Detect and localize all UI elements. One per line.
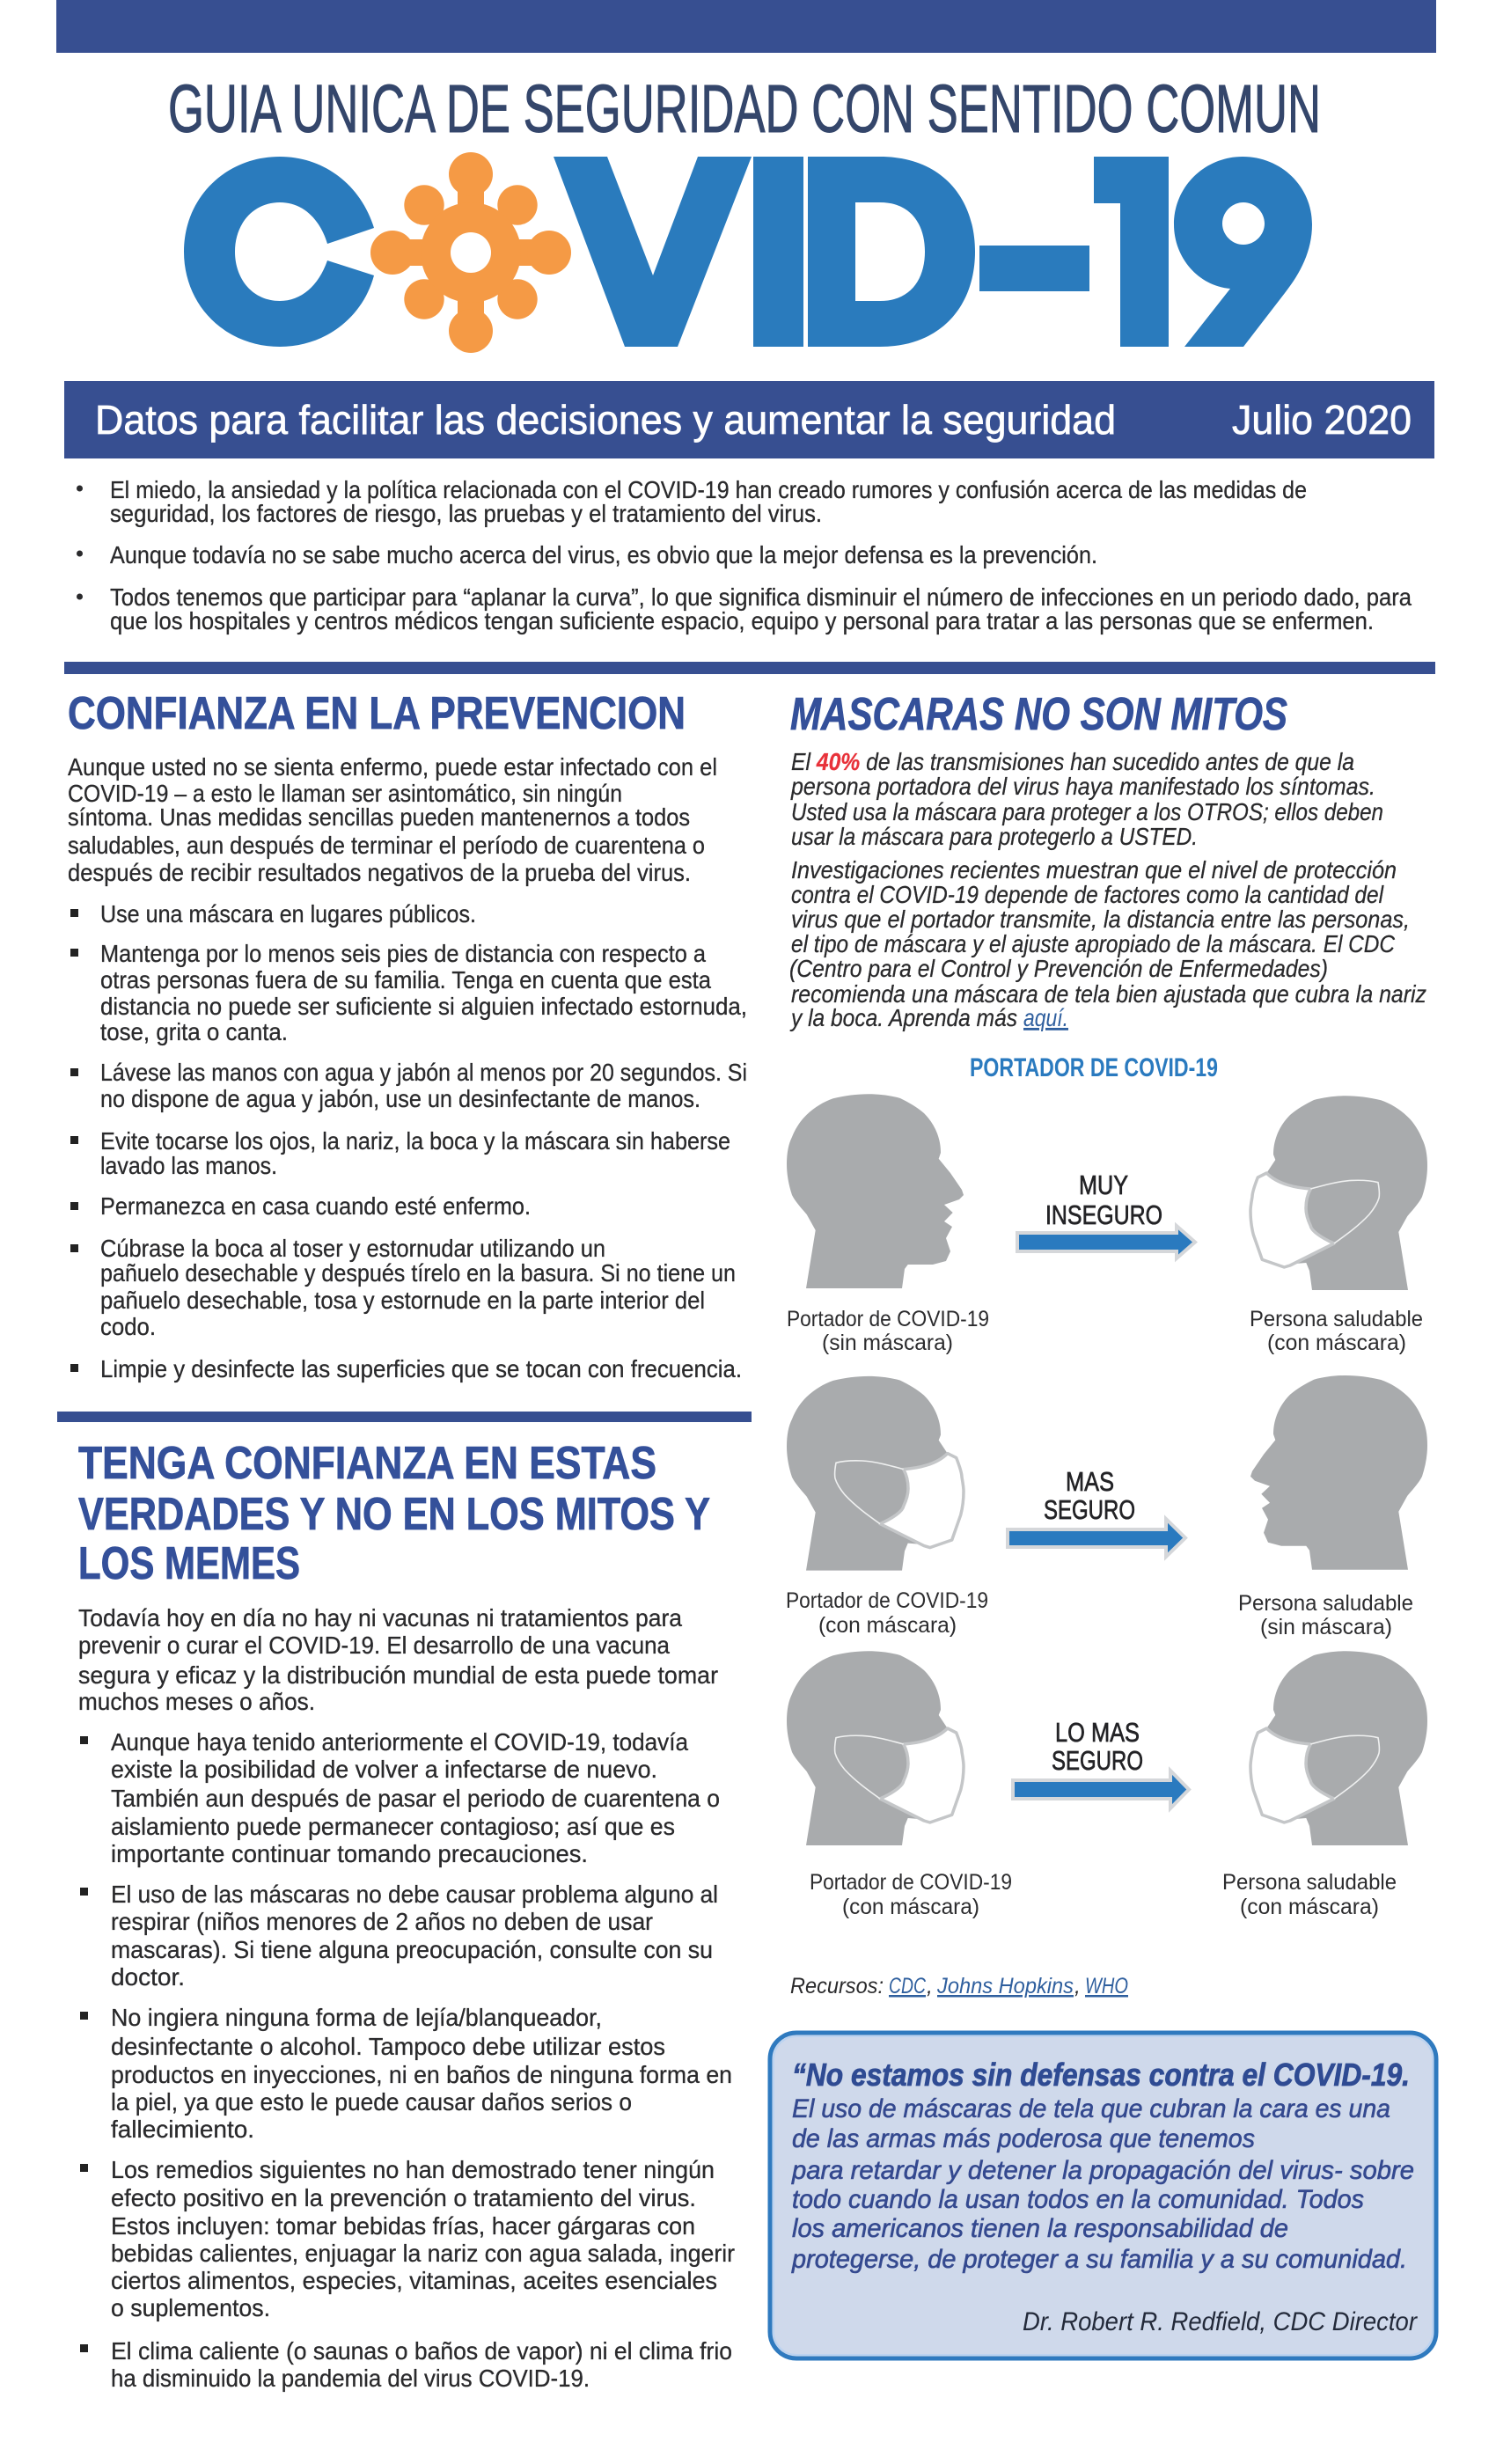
- truths bullet list: [80, 1728, 735, 2392]
- prevention bullet list: Mantenga por lo menos seis pies de distancia con respecto a: [100, 940, 706, 967]
- prevention bullet list: Limpie y desinfecte las superficies que se tocan con frecuencia.: [100, 1355, 742, 1382]
- masks paragraphs: Usted usa la máscara para proteger a los OTROS; ellos deben: [791, 798, 1383, 825]
- icon: healthy person with mask: [1250, 1651, 1427, 1845]
- truths bullet list: aislamiento puede permanecer contagioso; así que es: [111, 1813, 675, 1840]
- intro bullets: que los hospitales y centros médicos tengan suficiente espacio, equipo y personal para tratar a las personas que se enfermen.: [110, 607, 1374, 634]
- diagram heading: PORTADOR DE COVID-19: [970, 1053, 1218, 1082]
- intro paragraph: síntoma. Unas medidas sencillas pueden mantenernos a todos: [68, 803, 690, 831]
- truths bullet list: bebidas calientes, enjuagar la nariz con agua salada, ingerir: [111, 2240, 735, 2267]
- masks paragraphs: aquí.: [1023, 1004, 1068, 1031]
- captions: Portador de COVID-19: [787, 1307, 989, 1331]
- captions: [786, 1588, 1413, 1639]
- intro paragraph: prevenir o curar el COVID-19. El desarrollo de una vacuna: [78, 1632, 670, 1659]
- resources: [790, 1974, 1128, 1998]
- icon: carrier with mask: [787, 1376, 964, 1571]
- truths bullet list: importante continuar tomando precauciones.: [111, 1840, 588, 1867]
- intro bullets: Todos tenemos que participar para “aplanar la curva”, lo que significa disminuir el número de infecciones en un periodo dado, para: [110, 583, 1412, 611]
- resources: CDC: [889, 1974, 927, 1998]
- arrow: [1008, 1519, 1185, 1557]
- heading: TENGA CONFIANZA EN ESTAS: [78, 1438, 656, 1489]
- risk label: [1045, 1170, 1162, 1230]
- captions: Portador de COVID-19: [786, 1588, 988, 1613]
- prevention bullet list: otras personas fuera de su familia. Tenga en cuenta que esta: [100, 966, 711, 994]
- truths bullet list: mascaras). Si tiene alguna preocupación, consulte con su: [111, 1936, 713, 1963]
- prevention bullet list: distancia no puede ser suficiente si alguien infectado estornuda,: [100, 993, 747, 1020]
- truths bullet list: fallecimiento.: [111, 2116, 254, 2143]
- resources: ,: [1074, 1974, 1081, 1998]
- masks paragraphs: usar la máscara para protegerlo a USTED.: [791, 823, 1198, 850]
- risk label: SEGURO: [1052, 1745, 1143, 1776]
- icon: carrier with mask: [787, 1651, 964, 1845]
- callout: director quote: todo cuando la usan todos en la comunidad. Todos: [792, 2185, 1364, 2214]
- callout: director quote: los americanos tienen la responsabilidad de: [792, 2214, 1288, 2243]
- panel: truths and myths: [78, 1438, 735, 2392]
- intro paragraph: [68, 753, 717, 886]
- row 1: very unsafe: [787, 1094, 1427, 1355]
- intro paragraph: segura y eficaz y la distribución mundial de esta puede tomar: [78, 1661, 718, 1689]
- callout: director quote: “No estamos sin defensas contra el COVID-19.: [792, 2057, 1410, 2093]
- COVID-19 logo: [184, 152, 1312, 353]
- intro paragraph: COVID-19 – a esto le llaman ser asintomático, sin ningún: [68, 780, 622, 807]
- truths bullet list: existe la posibilidad de volver a infectarse de nuevo.: [111, 1756, 657, 1783]
- captions: (con máscara): [818, 1613, 957, 1638]
- prevention bullet list: Cúbrase la boca al toser y estornudar utilizando un: [100, 1235, 605, 1262]
- risk label: SEGURO: [1044, 1494, 1135, 1525]
- prevention bullet list: codo.: [100, 1313, 156, 1340]
- icon: carrier without mask: [787, 1094, 964, 1288]
- intro paragraph: Todavía hoy en día no hay ni vacunas ni tratamientos para: [78, 1604, 682, 1632]
- risk label: LO MAS: [1055, 1717, 1140, 1748]
- icon: orange virus: [370, 152, 571, 353]
- heading: CONFIANZA EN LA PREVENCION: [68, 688, 686, 739]
- resources: WHO: [1085, 1974, 1128, 1998]
- masks paragraphs: persona portadora del virus haya manifestado los síntomas.: [790, 773, 1375, 800]
- panel: prevention: [68, 688, 747, 1382]
- intro paragraph: muchos meses o años.: [78, 1688, 315, 1715]
- prevention bullet list: Evite tocarse los ojos, la nariz, la boca y la máscara sin haberse: [100, 1127, 730, 1155]
- captions: (con máscara): [1267, 1331, 1406, 1355]
- arrow: [1017, 1226, 1195, 1258]
- intro paragraph: después de recibir resultados negativos de la prueba del virus.: [68, 859, 691, 886]
- icon: healthy person without mask: [1250, 1375, 1427, 1570]
- callout: director quote: [770, 2033, 1436, 2358]
- captions: Persona saludable: [1250, 1307, 1423, 1331]
- prevention bullet list: no dispone de agua y jabón, use un desinfectante de manos.: [100, 1085, 700, 1112]
- heading: MASCARAS NO SON MITOS: [790, 689, 1287, 740]
- heading: [78, 1438, 710, 1589]
- prevention bullet list: tose, grita o canta.: [100, 1018, 288, 1045]
- prevention bullet list: Lávese las manos con agua y jabón al menos por 20 segundos. Si: [100, 1059, 747, 1086]
- truths bullet list: No ingiera ninguna forma de lejía/blanqueador,: [111, 2004, 602, 2031]
- heading: LOS MEMES: [78, 1538, 300, 1589]
- masks paragraphs: recomienda una máscara de tela bien ajustada que cubra la nariz: [791, 980, 1426, 1008]
- truths bullet list: doctor.: [111, 1963, 185, 1991]
- risk label: MAS: [1066, 1466, 1114, 1497]
- callout: director quote: para retardar y detener la propagación del virus- sobre: [791, 2156, 1414, 2185]
- intro bullets: Aunque todavía no se sabe mucho acerca del virus, es obvio que la mejor defensa es la prevención.: [110, 541, 1097, 568]
- captions: (sin máscara): [822, 1331, 953, 1355]
- resources: ,: [927, 1974, 933, 1998]
- prevention bullet list: lavado las manos.: [100, 1152, 277, 1179]
- heading: VERDADES Y NO EN LOS MITOS Y: [78, 1489, 710, 1540]
- logo letters: [184, 157, 1312, 347]
- row 3: safest: [787, 1651, 1427, 1919]
- intro paragraph: [78, 1604, 718, 1715]
- intro paragraph: saludables, aun después de terminar el período de cuarentena o: [68, 832, 705, 859]
- masks paragraphs: contra el COVID-19 depende de factores como la cantidad del: [791, 881, 1384, 908]
- captions: (con máscara): [1240, 1895, 1379, 1919]
- row 2: safer: [786, 1375, 1427, 1639]
- prevention bullet list: pañuelo desechable y después tírelo en la basura. Si no tiene un: [100, 1259, 736, 1287]
- arrow: [1013, 1771, 1189, 1808]
- masks paragraphs: virus que el portador transmite, la distancia entre las personas,: [791, 906, 1410, 933]
- prevention bullet list: pañuelo desechable, tosa y estornude en la parte interior del: [100, 1287, 705, 1314]
- resources: Johns Hopkins: [936, 1974, 1074, 1998]
- truths bullet list: o suplementos.: [111, 2294, 270, 2321]
- callout: director quote: de las armas más poderosa que tenemos: [792, 2124, 1255, 2153]
- subtitle band: Datos para facilitar las decisiones y aumentar la seguridad: [95, 397, 1116, 443]
- captions: (con máscara): [842, 1895, 979, 1919]
- callout: director quote: protegerse, de proteger a su familia y a su comunidad.: [791, 2245, 1407, 2274]
- icon: healthy person with mask: [1250, 1096, 1427, 1290]
- prevention bullet list: [70, 900, 747, 1382]
- captions: [787, 1307, 1423, 1355]
- prevention bullet list: Permanezca en casa cuando esté enfermo.: [100, 1192, 531, 1220]
- risk label: MUY: [1079, 1170, 1128, 1200]
- masks paragraphs: El 40% de las transmisiones han sucedido antes de que la: [791, 748, 1354, 775]
- subtitle band: [64, 381, 1434, 458]
- panel: masks: [786, 689, 1427, 1998]
- captions: [810, 1870, 1397, 1919]
- masks paragraphs: el tipo de máscara y el ajuste apropiado de la máscara. El CDC: [791, 930, 1396, 957]
- captions: Persona saludable: [1238, 1591, 1413, 1616]
- prevention bullet list: Use una máscara en lugares públicos.: [100, 900, 476, 928]
- captions: (sin máscara): [1260, 1615, 1392, 1639]
- truths bullet list: El clima caliente (o saunas o baños de vapor) ni el clima frio: [111, 2337, 732, 2365]
- truths bullet list: ha disminuido la pandemia del virus COVID-19.: [111, 2365, 590, 2392]
- subtitle band: Julio 2020: [1232, 397, 1412, 443]
- truths bullet list: desinfectante o alcohol. Tampoco debe utilizar estos: [111, 2033, 665, 2060]
- captions: Persona saludable: [1222, 1870, 1397, 1895]
- masks paragraphs: [789, 748, 1426, 1031]
- masks paragraphs: y la boca. Aprenda más: [789, 1004, 1017, 1031]
- top banner: [56, 0, 1436, 53]
- intro bullets: El miedo, la ansiedad y la política relacionada con el COVID-19 han creado rumores y confusión acerca de las medidas de: [110, 476, 1307, 503]
- truths bullet list: la piel, ya que esto le puede causar daños serios o: [111, 2088, 632, 2116]
- intro bullets: [77, 476, 1412, 634]
- truths bullet list: respirar (niños menores de 2 años no deben de usar: [111, 1908, 653, 1935]
- truths bullet list: También aun después de pasar el periodo de cuarentena o: [111, 1785, 720, 1812]
- truths bullet list: productos en inyecciones, ni en baños de ninguna forma en: [111, 2061, 732, 2088]
- risk label: INSEGURO: [1045, 1199, 1162, 1230]
- truths bullet list: Los remedios siguientes no han demostrado tener ningún: [111, 2156, 715, 2183]
- risk label: [1044, 1466, 1135, 1525]
- masks paragraphs: Investigaciones recientes muestran que el nivel de protección: [791, 856, 1397, 884]
- masks paragraphs: (Centro para el Control y Prevención de Enfermedades): [789, 955, 1328, 982]
- truths bullet list: El uso de las máscaras no debe causar problema alguno al: [111, 1881, 718, 1908]
- truths bullet list: Aunque haya tenido anteriormente el COVID-19, todavía: [111, 1728, 688, 1756]
- risk label: [1052, 1717, 1143, 1776]
- captions: Portador de COVID-19: [810, 1870, 1012, 1895]
- truths bullet list: efecto positivo en la prevención o tratamiento del virus.: [111, 2184, 696, 2211]
- intro bullets: seguridad, los factores de riesgo, las pruebas y el tratamiento del virus.: [110, 500, 822, 527]
- truths bullet list: Estos incluyen: tomar bebidas frías, hacer gárgaras con: [111, 2212, 695, 2240]
- resources: Recursos:: [790, 1974, 884, 1998]
- callout: director quote: Dr. Robert R. Redfield, CDC Director: [1023, 2307, 1418, 2336]
- callout: director quote: El uso de máscaras de tela que cubran la cara es una: [792, 2094, 1390, 2123]
- truths bullet list: ciertos alimentos, especies, vitaminas, aceites esenciales: [111, 2267, 717, 2294]
- intro paragraph: Aunque usted no se sienta enfermo, puede estar infectado con el: [68, 753, 717, 781]
